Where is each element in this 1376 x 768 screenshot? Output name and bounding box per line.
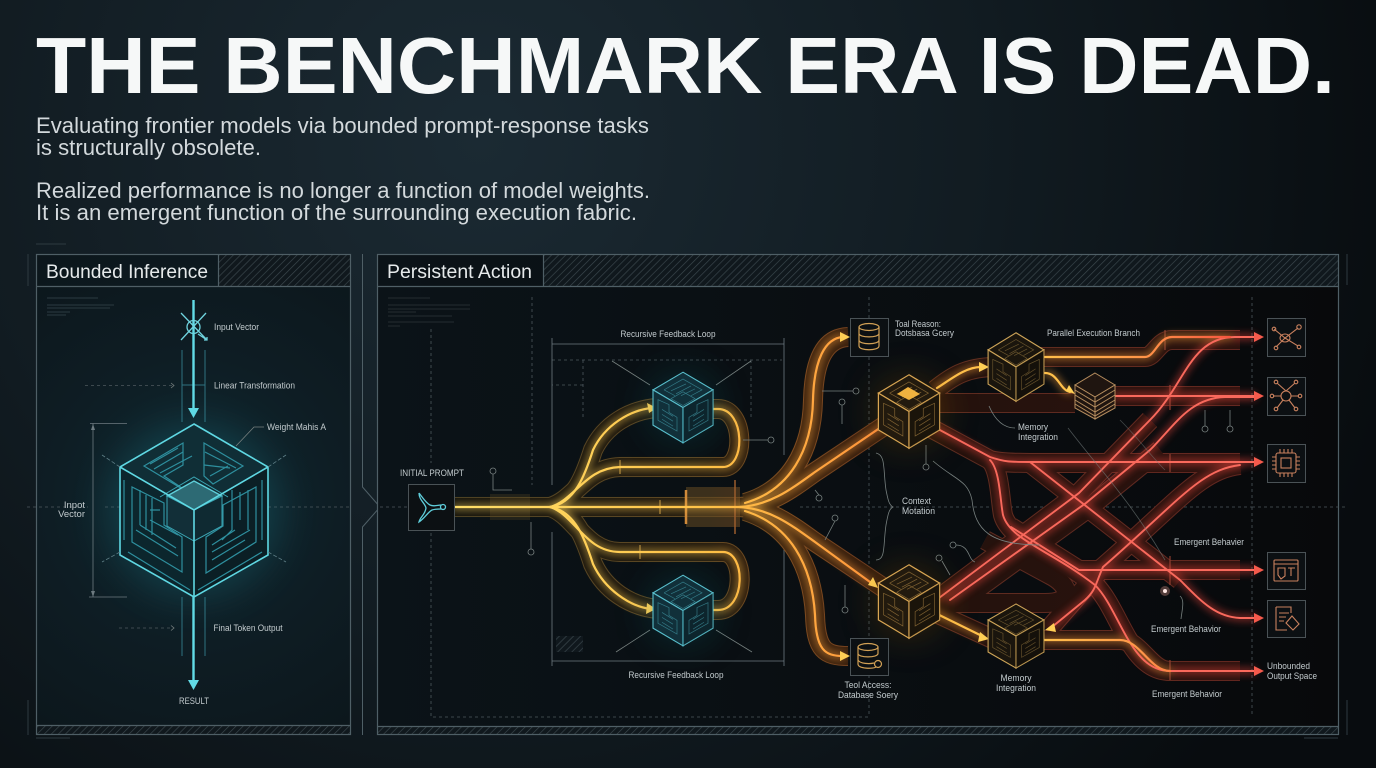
intro text block: is structurally obsolete. bbox=[36, 135, 261, 160]
label: unbounded output space: Unbounded bbox=[1267, 661, 1310, 672]
dimension bracket bbox=[89, 424, 127, 597]
icon: output document bbox=[1268, 600, 1306, 638]
label: linear transformation: Linear Transformation bbox=[214, 380, 295, 392]
label: memory integration lower bbox=[996, 673, 1036, 694]
panel label: initial prompt bbox=[400, 468, 464, 530]
recursive loop dimension lines bbox=[552, 329, 784, 666]
flow line: golden branches bbox=[454, 337, 890, 656]
label: input vector (side): Inpot bbox=[64, 500, 85, 511]
label: parallel execution branch: Parallel Execution Branch bbox=[1047, 328, 1140, 339]
title: THE BENCHMARK ERA IS DEAD. bbox=[36, 21, 1335, 110]
label: memory integration lower: Memory bbox=[1000, 673, 1032, 684]
heading: bounded inference: Bounded Inference bbox=[46, 261, 208, 283]
label: tool access upper bbox=[895, 319, 954, 339]
icon: input vector bbox=[181, 313, 207, 340]
small annotation lines bbox=[47, 298, 114, 315]
label: linear transformation bbox=[85, 380, 295, 392]
intro text block: Realized performance is no longer a function of model weights. bbox=[36, 178, 650, 203]
label: input vector (side): Vector bbox=[58, 509, 85, 520]
label: memory integration lower: Integration bbox=[996, 683, 1036, 694]
icon: teal cube upper bbox=[653, 372, 713, 443]
icon: stacked layers bbox=[1075, 373, 1115, 419]
blueprint dashed guides bbox=[380, 297, 1345, 717]
label: context mutation: Context bbox=[902, 496, 931, 507]
label: tool access lower: Teol Access: bbox=[844, 680, 892, 691]
label: tool access upper: Dotsbasa Gcery bbox=[895, 328, 954, 339]
cube glow bbox=[108, 424, 280, 596]
leader markers bbox=[490, 388, 1233, 613]
label: emergent behaviour 3: Emergent Behavior bbox=[1152, 689, 1222, 700]
label: input vector: Input Vector bbox=[214, 322, 259, 333]
icon: database lower bbox=[850, 638, 888, 676]
label: context mutation bbox=[876, 453, 935, 560]
margin tick marks bbox=[28, 244, 1347, 738]
emergent spark bbox=[1160, 586, 1183, 619]
intro text block: Evaluating frontier models via bounded prompt-response tasks bbox=[36, 113, 649, 138]
label: context mutation: Motation bbox=[902, 506, 935, 517]
centre dashed axis bbox=[27, 506, 352, 508]
label: memory integration upper bbox=[989, 406, 1058, 443]
flow tubes bbox=[455, 330, 1240, 680]
intro text block: It is an emergent function of the surrounding execution fabric. bbox=[36, 200, 637, 225]
flow line: red emergent paths bbox=[925, 337, 1254, 671]
label: final token output: Final Token Output bbox=[214, 623, 283, 634]
panel label: initial prompt: INITIAL PROMPT bbox=[400, 468, 464, 479]
panel: bounded inference bbox=[27, 254, 352, 734]
icon: output chip bbox=[1268, 444, 1306, 482]
label: weight matrix bbox=[236, 422, 327, 446]
label: memory integration upper: Integration bbox=[1018, 432, 1058, 443]
label: unbounded output space bbox=[1267, 661, 1317, 682]
label: recursive feedback loop (bottom): Recursive Feedback Loop bbox=[628, 670, 724, 681]
label: weight matrix: Weight Mahis A bbox=[267, 422, 327, 433]
label: input vector (side) bbox=[58, 500, 85, 520]
label: final token output bbox=[119, 623, 283, 634]
small annotation lines bbox=[388, 298, 470, 326]
icon: output graph bbox=[1268, 318, 1306, 356]
label: emergent behaviour 2: Emergent Behavior bbox=[1151, 624, 1221, 635]
glow lines bbox=[454, 337, 1254, 671]
label: tool access lower: Database Soery bbox=[838, 690, 898, 701]
label: tool access upper: Toal Reason: bbox=[895, 319, 941, 330]
panel: persistent action bbox=[378, 254, 1345, 734]
label: result: RESULT bbox=[179, 696, 209, 707]
icon: database upper bbox=[850, 318, 888, 356]
label: memory integration upper: Memory bbox=[1018, 422, 1048, 433]
icon: gold cube upper left bbox=[878, 375, 940, 448]
label: unbounded output space: Output Space bbox=[1267, 671, 1317, 682]
icon: output network bbox=[1268, 378, 1306, 416]
icon: gold cube lower left bbox=[878, 565, 940, 638]
label: emergent behaviour 1: Emergent Behavier bbox=[1174, 537, 1244, 548]
intro text block bbox=[36, 113, 650, 225]
input arrow bbox=[188, 300, 199, 690]
pipes bbox=[182, 350, 205, 656]
icon: gold cube upper right bbox=[988, 333, 1044, 401]
divider with chevron bbox=[362, 254, 380, 735]
icon: prompt box bbox=[408, 484, 454, 530]
icon: output dashboard bbox=[1268, 552, 1306, 590]
icon: central matrix cube bbox=[102, 424, 286, 597]
node glow bbox=[655, 379, 939, 638]
label: recursive feedback loop (top): Recursive Feedback Loop bbox=[620, 329, 716, 340]
icon: gold cube lower right bbox=[988, 604, 1044, 668]
label: tool access lower bbox=[838, 680, 898, 701]
icon: teal cube lower bbox=[653, 575, 713, 646]
arrowheads bbox=[646, 332, 1264, 676]
heading: persistent action: Persistent Action bbox=[387, 261, 532, 283]
flow line: amber connectors bbox=[925, 337, 1230, 671]
